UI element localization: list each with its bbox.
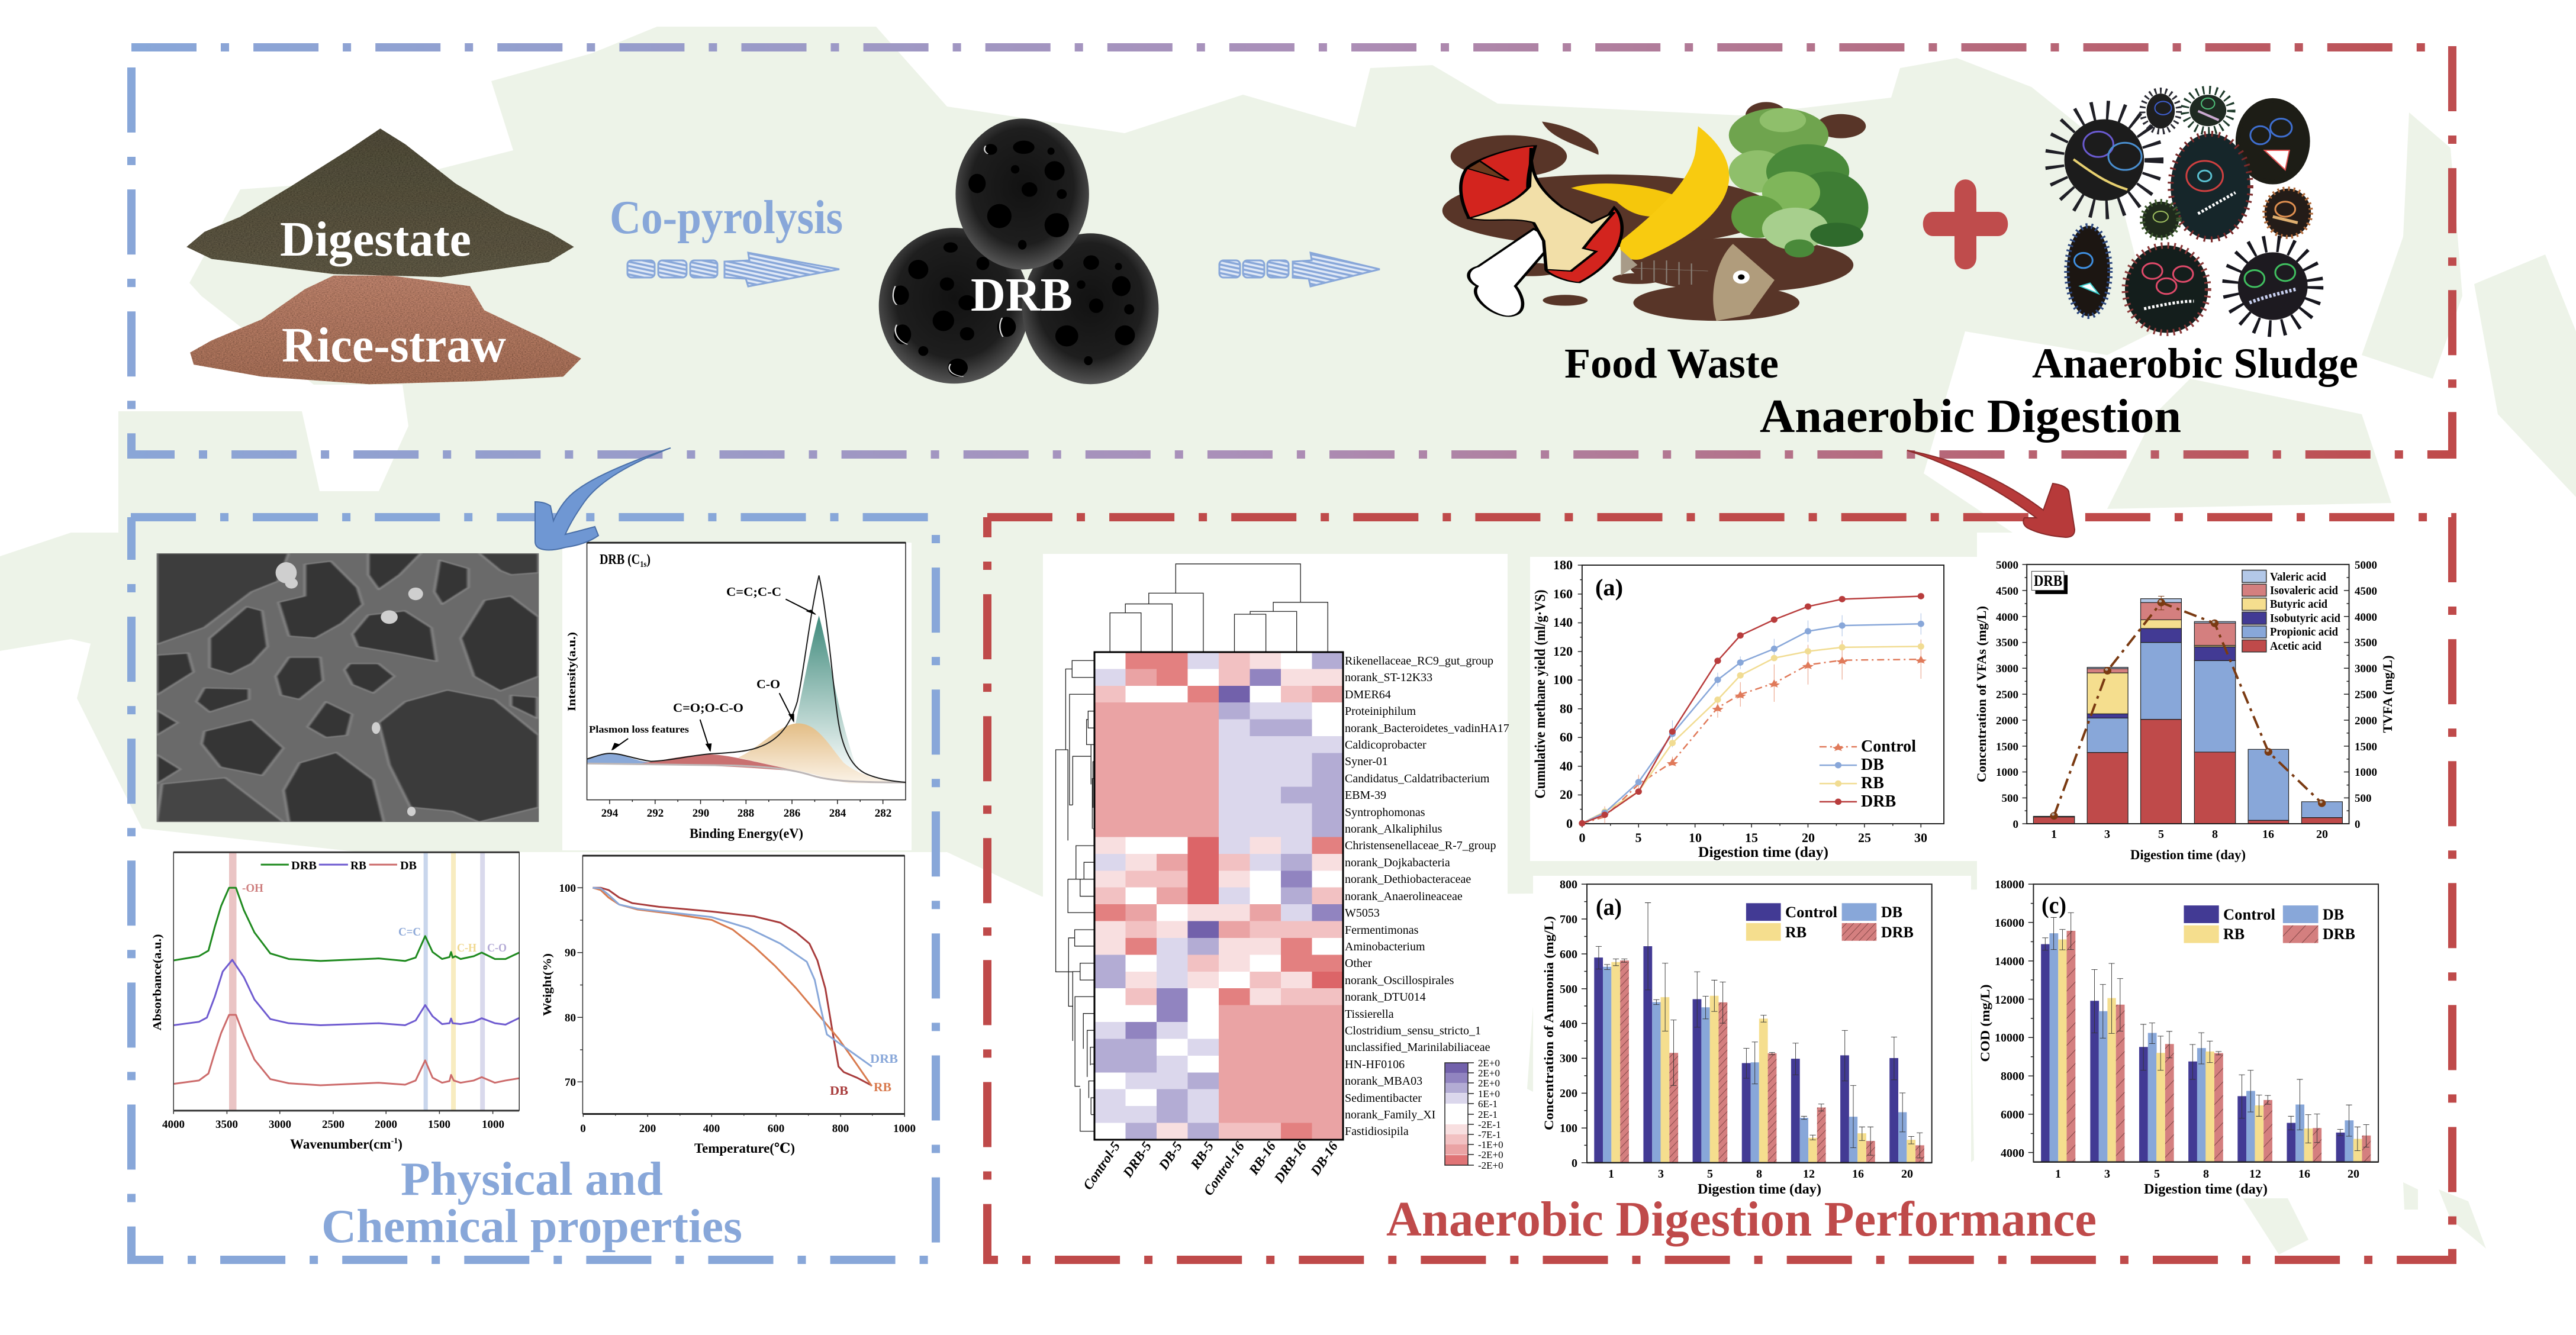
chart: cumulative methane yield: 140 xyxy=(1553,615,1573,630)
frame: top section xyxy=(127,46,2456,458)
chart: COD bars: 3 xyxy=(2104,1168,2110,1181)
chart: cumulative methane yield: 20 xyxy=(1802,830,1815,845)
chart: ammonia concentration bars: DB xyxy=(1881,904,1902,921)
chart: VFA composition stacked bars: 1000 xyxy=(1996,766,2018,779)
chart: cumulative methane yield: DRB xyxy=(1861,792,1896,811)
chart: VFA composition stacked bars: 1000 xyxy=(2355,766,2377,779)
heatmap row labels: Fermentimonas xyxy=(1345,924,1419,937)
chart: XPS C1s spectrum: 284 xyxy=(829,807,846,820)
heatmap colour legend: 2E+0 xyxy=(1478,1068,1500,1079)
chart: ammonia concentration bars: DRB xyxy=(1881,924,1914,941)
chart: VFA composition stacked bars: TVFA (mg/L) xyxy=(2380,656,2395,733)
chart: COD bars: 6000 xyxy=(2001,1108,2024,1121)
chart: VFA composition stacked bars: 5000 xyxy=(2355,559,2377,572)
chart: ammonia concentration bars: 100 xyxy=(1560,1122,1577,1135)
chart: TGA weight curves: RB xyxy=(874,1080,891,1094)
chart: VFA composition stacked bars: 1500 xyxy=(1996,741,2018,753)
chart: COD bars: (c) xyxy=(2042,892,2066,918)
heatmap column labels: RB-16 xyxy=(1246,1139,1279,1178)
chart: ammonia concentration bars: 20 xyxy=(1901,1168,1913,1181)
chart: cumulative methane yield: DB xyxy=(1861,756,1884,774)
chart: VFA composition stacked bars: Digestion time (day) xyxy=(2130,847,2246,862)
chart: VFA composition stacked bars: DRB xyxy=(2034,572,2062,589)
heatmap row labels: Rikenellaceae_RC9_gut_group xyxy=(1345,654,1493,668)
chart: VFA composition stacked bars: 20 xyxy=(2316,828,2328,841)
chart: ammonia concentration bars: 500 xyxy=(1560,983,1577,996)
chart: ammonia concentration bars: Digestion time (day) xyxy=(1698,1182,1821,1197)
chart: XPS C1s spectrum: C-O xyxy=(756,677,780,691)
chart: XPS C1s spectrum: 290 xyxy=(693,807,709,820)
chart: COD bars: Control xyxy=(2223,906,2275,923)
chart: cumulative methane yield: 40 xyxy=(1560,759,1573,773)
chart: VFA composition stacked bars: 0 xyxy=(2012,818,2018,831)
heatmap dendrograms xyxy=(1056,564,1328,1131)
icon: food waste illustration xyxy=(1442,102,1868,321)
heatmap row labels: norank_MBA03 xyxy=(1345,1075,1422,1088)
heatmap row labels: norank_DTU014 xyxy=(1345,991,1426,1004)
chart: FTIR spectra: 3500 xyxy=(215,1118,238,1131)
chart: COD bars: 14000 xyxy=(1995,955,2024,968)
chart: TGA weight curves: DRB xyxy=(870,1052,898,1066)
heatmap colour legend: 2E+0 xyxy=(1478,1078,1500,1089)
chart: cumulative methane yield: 0 xyxy=(1566,816,1573,831)
chart: COD bars: 12000 xyxy=(1995,994,2024,1007)
heatmap row labels: Sedimentibacter xyxy=(1345,1092,1422,1105)
heatmap colour legend: -2E+0 xyxy=(1478,1149,1503,1160)
heatmap row labels: HN-HF0106 xyxy=(1345,1058,1405,1071)
icon: anaerobic sludge microbes xyxy=(2055,90,2315,333)
label: Food Waste: Food Waste xyxy=(1564,340,1779,387)
chart: FTIR spectra: ) xyxy=(398,1137,402,1152)
heading: Physical and Chemical properties: Chemical properties xyxy=(321,1201,742,1253)
chart: ammonia concentration bars: 3 xyxy=(1658,1168,1664,1181)
envelope curve xyxy=(587,575,906,782)
heatmap colour legend: -2E-1 xyxy=(1478,1119,1501,1130)
chart: VFA composition stacked bars: 4500 xyxy=(2355,585,2377,598)
chart: VFA composition stacked bars: 500 xyxy=(2355,792,2371,805)
chart: cumulative methane yield: 0 xyxy=(1579,830,1585,845)
chart: VFA composition stacked bars: 500 xyxy=(2002,792,2018,805)
chart: cumulative methane yield: 25 xyxy=(1858,830,1871,845)
chart: FTIR spectra: C-O xyxy=(487,941,507,955)
chart: FTIR spectra: 4000 xyxy=(162,1118,185,1131)
chart: cumulative methane yield: 180 xyxy=(1553,557,1573,572)
chart: ammonia concentration bars: 1 xyxy=(1608,1168,1614,1181)
chart: VFA composition stacked bars: 4000 xyxy=(2355,611,2377,624)
chart: cumulative methane yield xyxy=(1532,557,1944,860)
plasmon loss peak xyxy=(587,753,659,765)
label: Rice-straw: Rice-straw xyxy=(282,318,506,373)
heatmap row labels: norank_Dethiobacteraceae xyxy=(1345,873,1471,886)
chart: TGA weight curves: DB xyxy=(830,1084,848,1098)
chart: FTIR spectra: Wavenumber(cm xyxy=(290,1137,391,1152)
heatmap colour legend: 6E-1 xyxy=(1478,1098,1498,1110)
chart: cumulative methane yield: Control xyxy=(1861,737,1916,756)
chart: XPS C1s spectrum: 288 xyxy=(738,807,754,820)
icon: porous biochar spheres DRB xyxy=(879,118,1158,384)
chart: TGA weight curves: 100 xyxy=(559,882,576,895)
chart: ammonia concentration bars: 600 xyxy=(1560,948,1577,961)
heatmap row labels: norank_ST-12K33 xyxy=(1345,671,1432,684)
heatmap colour legend xyxy=(1445,1057,1503,1171)
heatmap row labels: norank_Bacteroidetes_vadinHA17 xyxy=(1345,722,1509,735)
chart: ammonia concentration bars: Control xyxy=(1785,904,1837,921)
chart: VFA composition stacked bars: 2000 xyxy=(2355,715,2377,727)
heatmap row labels: norank_Dojkabacteria xyxy=(1345,856,1450,869)
chart: FTIR spectra: C-H xyxy=(457,941,476,955)
chart: cumulative methane yield: 5 xyxy=(1635,830,1642,845)
heatmap column labels: DB-16 xyxy=(1308,1139,1341,1179)
heatmap colour legend: 2E-1 xyxy=(1478,1109,1498,1120)
heatmap row labels: Caldicoprobacter xyxy=(1345,739,1427,752)
chart: VFA composition stacked bars: Propionic acid xyxy=(2270,625,2338,639)
chart: VFA composition stacked bars: Concentration of VFAs (mg/L) xyxy=(1974,606,1989,782)
chart: COD bars: 10000 xyxy=(1995,1031,2024,1044)
chart: FTIR spectra xyxy=(151,852,519,1152)
chart: ammonia concentration bars: 800 xyxy=(1560,878,1577,891)
chart: ammonia concentration bars: (a) xyxy=(1596,894,1622,920)
chart: XPS C1s spectrum: Binding Energy(eV) xyxy=(690,826,803,841)
chart: XPS C1s spectrum: 1s xyxy=(640,560,646,569)
heatmap column labels: DB-5 xyxy=(1155,1139,1185,1173)
heatmap row labels: EBM-39 xyxy=(1345,789,1386,802)
chart: microbial community heatmap xyxy=(1056,564,1509,1198)
chart: XPS C1s spectrum xyxy=(566,543,906,841)
heatmap row labels: Syntrophomonas xyxy=(1345,806,1425,819)
chart: FTIR spectra: DRB xyxy=(291,859,317,872)
arrow: blue curved arrow to physical panel xyxy=(535,448,671,550)
chart: ammonia concentration bars: 12 xyxy=(1803,1168,1815,1181)
chart: COD bars: RB xyxy=(2223,926,2245,943)
C=O;O-C-O peak xyxy=(632,754,801,772)
heatmap column labels: RB-5 xyxy=(1187,1139,1216,1172)
chart: COD bars: 20 xyxy=(2348,1168,2359,1181)
chart: cumulative methane yield: 120 xyxy=(1553,644,1573,659)
heatmap column labels: Control-5 xyxy=(1080,1139,1123,1192)
chart: XPS C1s spectrum: C=C;C-C xyxy=(726,585,781,599)
chart: ammonia concentration bars: RB xyxy=(1785,924,1807,941)
heatmap row labels: Candidatus_Caldatribacterium xyxy=(1345,772,1490,785)
chart: COD bars: 16000 xyxy=(1995,917,2024,930)
chart: FTIR spectra: DB xyxy=(400,859,417,872)
chart: FTIR spectra: 2000 xyxy=(375,1118,397,1131)
chart: TGA weight curves: 90 xyxy=(565,947,576,959)
chart: FTIR spectra: 1000 xyxy=(482,1118,504,1131)
chart: VFA composition stacked bars: 3500 xyxy=(1996,637,2018,649)
chart: TGA weight curves: 0 xyxy=(580,1123,586,1135)
heatmap row labels: Christensenellaceae_R-7_group xyxy=(1345,839,1496,852)
heatmap colour legend: -7E-1 xyxy=(1478,1129,1501,1140)
heading: Anaerobic Digestion: Anaerobic Digestion xyxy=(1760,391,2181,443)
chart: XPS C1s spectrum: 282 xyxy=(875,807,891,820)
arrow: biochar to digestion striped arrow xyxy=(1219,253,1380,286)
chart: cumulative methane yield: 20 xyxy=(1560,787,1573,802)
chart: XPS C1s spectrum: 292 xyxy=(647,807,664,820)
chart: cumulative methane yield: 15 xyxy=(1745,830,1758,845)
frame: anaerobic digestion performance panel xyxy=(983,517,2456,1264)
chart: TGA weight curves: 400 xyxy=(703,1123,720,1135)
chart: COD bars: 1 xyxy=(2055,1168,2061,1181)
heatmap row labels: norank_Anaerolineaceae xyxy=(1345,890,1463,903)
chart: COD bars: COD (mg/L) xyxy=(1978,985,1992,1062)
image: SEM micrograph of biochar xyxy=(157,553,539,822)
chart: TGA weight curves: Weight(%) xyxy=(541,953,554,1016)
chart: cumulative methane yield: Digestion time (day) xyxy=(1698,844,1828,860)
baseline xyxy=(587,763,906,782)
arrow: red curved arrow to performance panel xyxy=(1907,450,2075,537)
chart: VFA composition stacked bars: Isobutyric acid xyxy=(2270,612,2340,625)
chart: ammonia concentration bars: 400 xyxy=(1560,1018,1577,1031)
chart: VFA composition stacked bars: 3000 xyxy=(2355,663,2377,675)
chart: VFA composition stacked bars: 2500 xyxy=(2355,689,2377,701)
arrow: co-pyrolysis striped arrow xyxy=(627,253,839,286)
heatmap column labels: DRB-5 xyxy=(1120,1139,1154,1181)
chart: cumulative methane yield: 160 xyxy=(1553,586,1573,601)
heatmap colour legend: 1E+0 xyxy=(1478,1088,1500,1099)
heatmap row labels: Clostridium_sensu_stricto_1 xyxy=(1345,1024,1481,1037)
chart: FTIR spectra: 3000 xyxy=(269,1118,291,1131)
chart: COD bars: 4000 xyxy=(2001,1147,2024,1160)
chart: FTIR spectra: -1 xyxy=(391,1137,398,1146)
chart: COD bars: 12 xyxy=(2249,1168,2261,1181)
chart: ammonia concentration bars: Concentration of Ammonia (mg/L) xyxy=(1541,916,1556,1130)
chart: COD bars: DRB xyxy=(2323,926,2355,943)
chart: VFA composition stacked bars: 0 xyxy=(2355,818,2361,831)
panel backgrounds: white chart areas xyxy=(136,533,2445,1255)
heatmap column labels xyxy=(1080,1139,1341,1198)
label: Anaerobic Sludge: Anaerobic Sludge xyxy=(2032,340,2358,387)
chart: COD bars: 5 xyxy=(2154,1168,2160,1181)
chart: ammonia concentration bars: 16 xyxy=(1852,1168,1864,1181)
chart: XPS C1s spectrum: 294 xyxy=(601,807,619,820)
chart: ammonia concentration bars xyxy=(1541,878,1932,1197)
heatmap colour legend: 2E+0 xyxy=(1478,1057,1500,1069)
heatmap row labels: norank_Oscillospirales xyxy=(1345,974,1454,987)
chart: COD bars: 8000 xyxy=(2001,1070,2024,1083)
heatmap row labels xyxy=(1345,654,1509,1138)
label: DRB: DRB xyxy=(971,269,1073,321)
heatmap row labels: Aminobacterium xyxy=(1345,940,1425,953)
chart: cumulative methane yield: (a) xyxy=(1595,574,1623,601)
heading: Co-pyrolysis: Co-pyrolysis xyxy=(610,192,843,244)
heatmap column labels: DRB-16 xyxy=(1271,1139,1309,1186)
chart: FTIR spectra: 1500 xyxy=(428,1118,450,1131)
heatmap row labels: Proteiniphilum xyxy=(1345,705,1416,718)
chart: VFA composition stacked bars: Valeric acid xyxy=(2270,570,2326,583)
chart: ammonia concentration bars: 0 xyxy=(1572,1157,1577,1170)
chart: COD bars: Digestion time (day) xyxy=(2144,1182,2268,1197)
chart: cumulative methane yield: 80 xyxy=(1560,701,1573,716)
chart: COD bars: 16 xyxy=(2298,1168,2310,1181)
chart: TGA weight curves: 80 xyxy=(565,1012,576,1024)
heatmap row labels: Other xyxy=(1345,957,1372,970)
heatmap row labels: unclassified_Marinilabiliaceae xyxy=(1345,1041,1490,1054)
chart: FTIR spectra: -OH xyxy=(242,882,263,895)
chart: XPS C1s spectrum: ) xyxy=(646,552,651,567)
chart: FTIR spectra: Absorbance(a.u.) xyxy=(151,934,164,1031)
heatmap row labels: norank_Alkaliphilus xyxy=(1345,823,1442,836)
chart: TGA weight curves: 800 xyxy=(832,1123,849,1135)
chart: VFA composition stacked bars: 2000 xyxy=(1996,715,2018,727)
chart: TGA weight curves: 1000 xyxy=(893,1123,916,1135)
chart: XPS C1s spectrum: Plasmon loss features xyxy=(589,724,689,735)
heatmap colour legend: -1E+0 xyxy=(1478,1139,1503,1150)
frame: physical and chemical panel xyxy=(127,517,936,1264)
chart: TGA weight curves xyxy=(541,856,916,1156)
chart: VFA composition stacked bars: Acetic acid xyxy=(2270,640,2321,653)
chart: ammonia concentration bars: 300 xyxy=(1560,1052,1577,1065)
chart: VFA composition stacked bars: 4000 xyxy=(1996,611,2018,624)
chart: ammonia concentration bars: 8 xyxy=(1756,1168,1762,1181)
chart: cumulative methane yield: 60 xyxy=(1560,730,1573,744)
chart: TGA weight curves: 600 xyxy=(768,1123,784,1135)
heatmap colour legend: -2E+0 xyxy=(1478,1160,1503,1171)
chart: COD bars: 18000 xyxy=(1995,878,2024,891)
chart: VFA composition stacked bars: 5 xyxy=(2158,828,2164,841)
heatmap row labels: norank_Family_XI xyxy=(1345,1108,1435,1121)
heading: Physical and Chemical properties xyxy=(321,1153,742,1253)
chart: VFA composition stacked bars xyxy=(1974,559,2395,862)
chart: XPS C1s spectrum: 286 xyxy=(784,807,800,820)
chart: VFA composition stacked bars: Butyric acid xyxy=(2270,598,2327,611)
chart: XPS C1s spectrum: Intensity(a.u.) xyxy=(566,632,578,711)
chart: ammonia concentration bars: 5 xyxy=(1707,1168,1713,1181)
chart: TGA weight curves: 70 xyxy=(565,1076,576,1089)
C-O peak xyxy=(738,723,906,783)
heading: Anaerobic Digestion Performance: Anaerobic Digestion Performance xyxy=(1386,1192,2097,1247)
chart: VFA composition stacked bars: Isovaleric acid xyxy=(2270,584,2338,597)
label: Digestate: Digestate xyxy=(280,212,471,267)
chart: VFA composition stacked bars: 1500 xyxy=(2355,741,2377,753)
chart: cumulative methane yield: RB xyxy=(1861,774,1884,792)
chart: cumulative methane yield: 10 xyxy=(1689,830,1702,845)
chart: FTIR spectra: 2500 xyxy=(322,1118,344,1131)
chart: COD bars: 8 xyxy=(2203,1168,2209,1181)
chart: VFA composition stacked bars: 1 xyxy=(2051,828,2057,841)
chart: cumulative methane yield: 30 xyxy=(1914,830,1927,845)
chart: ammonia concentration bars: 200 xyxy=(1560,1087,1577,1100)
heatmap row labels: Fastidiosipila xyxy=(1345,1125,1409,1138)
chart: TGA weight curves: Temperature(℃) xyxy=(694,1141,795,1156)
heatmap column labels: Control-16 xyxy=(1201,1139,1247,1198)
chart: COD bars: DB xyxy=(2323,906,2344,923)
chart: cumulative methane yield: 100 xyxy=(1553,672,1573,687)
chart: VFA composition stacked bars: 16 xyxy=(2262,828,2274,841)
heatmap row labels: Tissierella xyxy=(1345,1008,1394,1021)
digestate and rice-straw powder piles xyxy=(186,128,581,384)
chart: cumulative methane yield: Cumulative methane yield (ml/g·VS) xyxy=(1532,589,1548,799)
chart: XPS C1s spectrum: DRB (C xyxy=(600,552,648,567)
chart: FTIR spectra: C=C xyxy=(398,926,421,939)
icon: red plus sign xyxy=(1923,179,2008,269)
C=C;C-C peak xyxy=(785,615,862,782)
heatmap row labels: DMER64 xyxy=(1345,688,1391,701)
chart: FTIR spectra: RB xyxy=(350,859,366,872)
chart: VFA composition stacked bars: 8 xyxy=(2212,828,2218,841)
chart: COD bars xyxy=(1978,878,2378,1197)
heatmap row labels: W5053 xyxy=(1345,907,1380,920)
chart: ammonia concentration bars: 700 xyxy=(1560,913,1577,926)
heading: Physical and Chemical properties: Physical and xyxy=(401,1153,663,1205)
chart: TGA weight curves: 200 xyxy=(639,1123,656,1135)
chart: VFA composition stacked bars: 5000 xyxy=(1996,559,2018,572)
heatmap row labels: Syner-01 xyxy=(1345,755,1388,768)
chart: VFA composition stacked bars: 2500 xyxy=(1996,689,2018,701)
chart: VFA composition stacked bars: 3 xyxy=(2104,828,2110,841)
chart: XPS C1s spectrum: C=O;O-C-O xyxy=(673,701,743,715)
chart: VFA composition stacked bars: 4500 xyxy=(1996,585,2018,598)
chart: VFA composition stacked bars: 3500 xyxy=(2355,637,2377,649)
chart: VFA composition stacked bars: 3000 xyxy=(1996,663,2018,675)
